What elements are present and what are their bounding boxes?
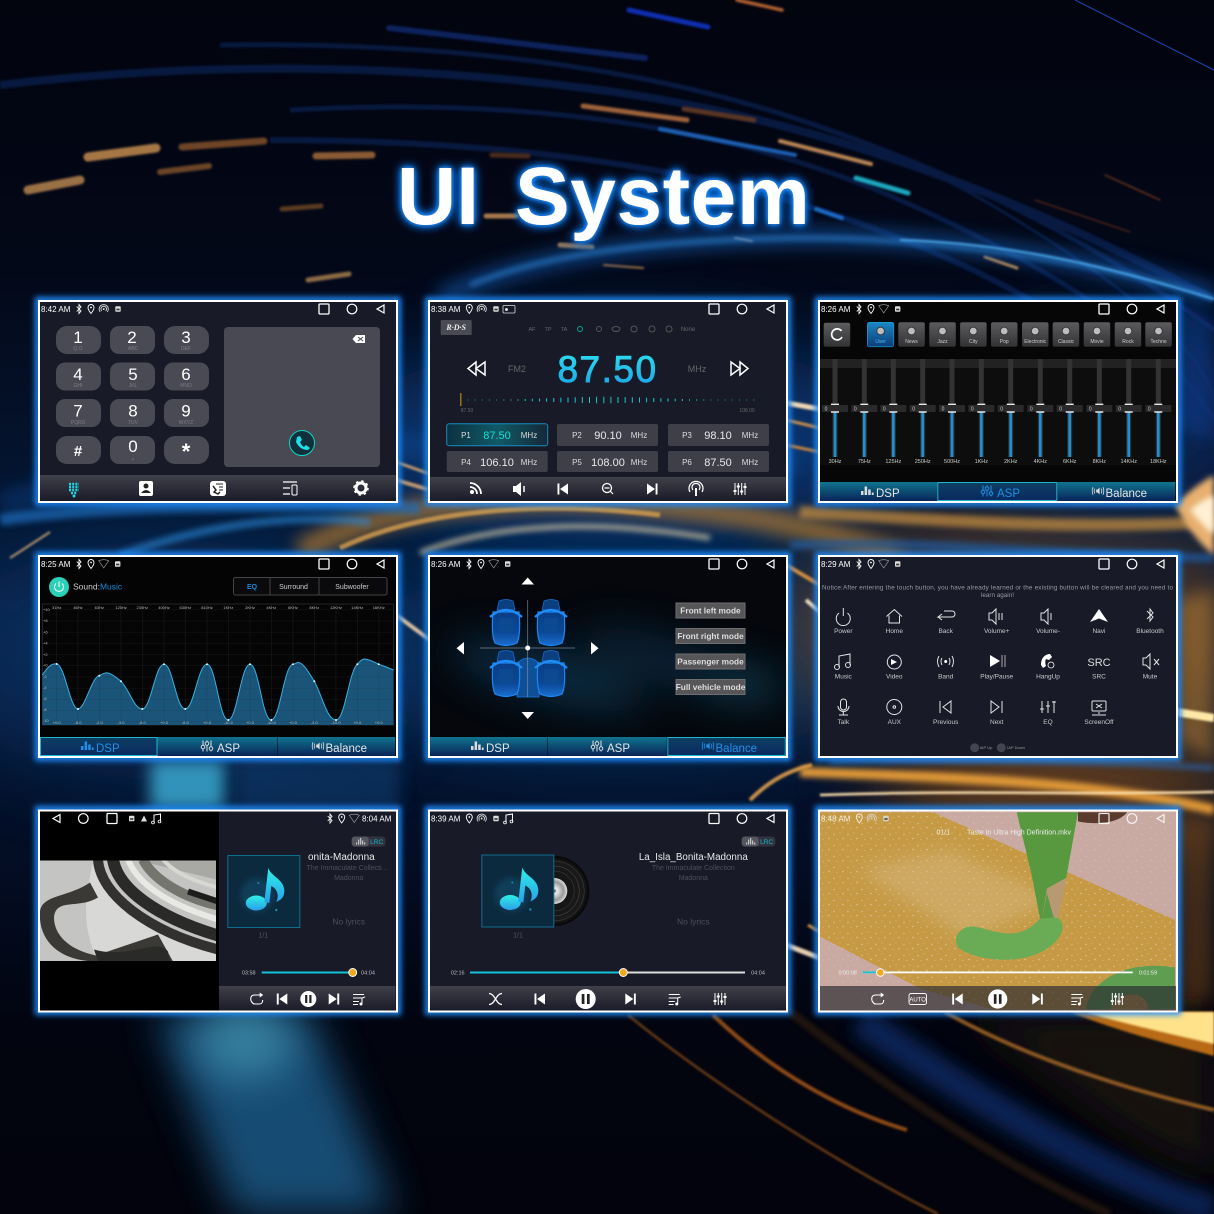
function buttons: Talk xyxy=(838,719,850,726)
dial keypad: 9 xyxy=(181,402,191,420)
mode buttons: Front left mode xyxy=(680,606,741,616)
balance crosshair xyxy=(480,600,575,697)
bottom bar xyxy=(40,475,396,501)
EQ chart: -8.0 xyxy=(182,720,190,725)
playback bar xyxy=(430,986,786,1010)
status bar xyxy=(821,304,1164,314)
mid swirl xyxy=(300,499,900,560)
mode tabs: Subwoofer xyxy=(335,584,369,591)
album art xyxy=(482,855,554,927)
sound presets: Techno xyxy=(1150,339,1167,345)
presets: P3 xyxy=(682,431,692,440)
EQ chart: -10 xyxy=(43,718,50,723)
slider bank: 500Hz xyxy=(944,459,960,465)
margin streaks beside panels xyxy=(396,403,1214,958)
EQ chart: 12KHz xyxy=(330,605,342,610)
presets: 106.10 xyxy=(480,457,514,469)
direction arrows xyxy=(456,578,598,719)
EQ chart: +0.0 xyxy=(353,720,362,725)
function buttons: ScreenOff xyxy=(1084,719,1114,726)
video frame xyxy=(820,812,1176,1010)
panel: music player with vinyl xyxy=(429,810,787,1012)
dim concentric arcs xyxy=(0,45,1214,420)
mode buttons: Front right mode xyxy=(677,631,744,641)
RDS flags: TA xyxy=(561,327,568,333)
slider bank: 0 xyxy=(912,406,915,412)
EQ chart: +2 xyxy=(43,652,48,657)
mode buttons: Passenger mode xyxy=(677,656,744,666)
presets: MHz xyxy=(521,431,537,440)
EQ chart: -8.0 xyxy=(139,720,147,725)
slider bank: 4KHz xyxy=(1034,459,1047,465)
presets: P1 xyxy=(461,431,471,440)
slider bank: 8KHz xyxy=(1093,459,1106,465)
tab bar xyxy=(40,737,395,756)
EQ chart: 2KHz xyxy=(245,605,255,610)
dial keypad xyxy=(56,326,209,464)
tab bar xyxy=(430,737,785,756)
function buttons xyxy=(834,608,1164,726)
presets: 90.10 xyxy=(594,430,622,442)
tab bar xyxy=(820,482,1175,501)
vinyl record xyxy=(519,856,589,926)
playback bar xyxy=(820,986,1176,1010)
slider bank: 0 xyxy=(854,406,857,412)
status bar: 8:25 AM xyxy=(41,560,71,569)
EQ chart: 8KHz xyxy=(309,605,319,610)
RDS button: R·D·S xyxy=(445,323,467,332)
track info: The Immaculate Collection xyxy=(652,865,735,872)
slider bank: 250Hz xyxy=(915,459,931,465)
EQ chart: 630Hz xyxy=(180,605,191,610)
slider bank: 18KHz xyxy=(1150,459,1167,465)
EQ chart: -3.0 xyxy=(118,720,125,725)
unit: MHz xyxy=(688,364,707,374)
bottom right swirl xyxy=(860,1020,1214,1210)
track info: La_Isla_Bonita-Madonna xyxy=(639,852,748,863)
progress bar: 03:58 xyxy=(242,970,256,976)
slider bank: 125Hz xyxy=(885,459,901,465)
power toggle xyxy=(49,577,69,597)
status bar xyxy=(431,814,774,824)
track info: 1/1 xyxy=(513,932,523,940)
status bar: 8:48 AM xyxy=(821,814,851,824)
status bar: 8:26 AM xyxy=(431,560,461,569)
EQ chart: -2.0 xyxy=(96,720,104,725)
function buttons: Band xyxy=(938,674,954,680)
track info xyxy=(513,852,748,940)
presets: P2 xyxy=(572,431,582,440)
dial keypad: 2 xyxy=(127,328,137,347)
function buttons: SRC xyxy=(1087,657,1111,669)
sound presets xyxy=(867,322,1172,347)
RDS flags: TP xyxy=(544,327,552,333)
status bar xyxy=(821,814,1164,824)
function buttons: Power xyxy=(834,628,853,635)
tab bar: Balance xyxy=(1106,488,1147,500)
tab bar: DSP xyxy=(96,743,120,755)
RDS button xyxy=(441,320,472,335)
dial keypad: JKL xyxy=(129,383,138,389)
EQ chart: 63Hz xyxy=(95,605,104,610)
lower swirl xyxy=(150,760,225,810)
EQ chart: 230Hz xyxy=(137,605,148,610)
presets: 87.50 xyxy=(704,457,732,469)
slider bank: 0 xyxy=(1000,406,1003,412)
EQ chart: +0 xyxy=(43,662,48,668)
status bar: 8:26 AM xyxy=(821,305,851,314)
slider bank: 0 xyxy=(971,406,974,412)
EQ chart: +0.0 xyxy=(160,720,169,725)
IAP controls: IAP Up xyxy=(980,745,993,750)
EQ chart: +0.0 xyxy=(375,720,383,725)
sound presets: News xyxy=(905,339,918,345)
EQ chart: -10.0 xyxy=(331,720,341,725)
fast forward xyxy=(731,362,748,375)
dial keypad: ABC xyxy=(128,346,139,352)
dial keypad: 1 xyxy=(73,328,83,347)
dial keypad: 5 xyxy=(128,365,138,384)
function buttons: Next xyxy=(990,719,1004,726)
EQ chart: 31Hz xyxy=(52,605,61,610)
track info: No lyrics xyxy=(332,916,365,926)
status bar: 8:29 AM xyxy=(821,560,851,569)
sound presets: User xyxy=(875,339,886,345)
notice: Notice:After entering the touch button, you have already learned or the existing button will be cleared and you need to xyxy=(822,584,1173,592)
function buttons: Music xyxy=(835,674,853,680)
panel: FM radio xyxy=(429,301,787,502)
progress bar: 0:00:08 xyxy=(839,970,857,976)
notice xyxy=(822,584,1173,599)
function buttons: EQ xyxy=(1043,719,1053,726)
EQ chart: -6 xyxy=(43,696,47,701)
track info: Madonna xyxy=(334,875,363,882)
presets: MHz xyxy=(742,431,758,440)
tab bar: ASP xyxy=(607,743,630,755)
tab bar: Balance xyxy=(716,743,757,755)
sound presets: Rock xyxy=(1122,339,1134,345)
mode tabs xyxy=(234,578,387,595)
album art xyxy=(228,856,300,928)
dial keypad: * xyxy=(182,439,191,464)
file title: Taste in Ultra High Definition.mkv xyxy=(967,830,1072,836)
presets: 87.50 xyxy=(483,430,511,442)
EQ chart: 400Hz xyxy=(158,605,170,610)
dial keypad: DEF xyxy=(181,346,191,352)
progress bar: 0:01:59 xyxy=(1139,970,1157,976)
EQ chart: 46Hz xyxy=(73,605,83,610)
dial keypad: 8 xyxy=(128,402,138,420)
LRC toggle xyxy=(742,836,775,846)
refresh button xyxy=(824,323,850,347)
EQ chart: 810Hz xyxy=(201,605,213,610)
function buttons: Play/Pause xyxy=(980,674,1014,680)
dial keypad: 7 xyxy=(73,402,83,420)
progress bar: 04:04 xyxy=(361,970,375,976)
function buttons: Back xyxy=(938,628,954,635)
dial keypad: TUV xyxy=(128,420,139,426)
bottom light column xyxy=(155,1012,395,1214)
sound presets: City xyxy=(969,339,978,345)
bottom bar xyxy=(430,477,786,501)
title: UI System: System xyxy=(515,151,810,242)
EQ chart: 4KHz xyxy=(266,605,276,610)
presets: P6 xyxy=(682,458,692,467)
dial keypad: 4 xyxy=(73,365,83,384)
status bar xyxy=(431,304,774,314)
streak dashes xyxy=(28,0,1160,280)
status bar: 8:38 AM xyxy=(431,305,461,314)
function buttons: Mute xyxy=(1143,674,1158,680)
playback bar: AUTO xyxy=(909,998,926,1004)
slider bank: 0 xyxy=(942,406,945,412)
function buttons: Navi xyxy=(1092,628,1106,635)
EQ chart: +4 xyxy=(43,640,48,646)
cookware photo xyxy=(40,860,218,962)
sound presets: Pop xyxy=(1000,339,1009,345)
sound presets: Movie xyxy=(1090,339,1104,345)
dial keypad: # xyxy=(74,443,83,460)
black video pane xyxy=(40,812,219,1010)
progress bar: 02:16 xyxy=(451,970,465,976)
EQ chart: +0.0 xyxy=(289,720,298,725)
function buttons: Volume+ xyxy=(984,628,1010,635)
RDS flags: AF xyxy=(528,327,536,333)
EQ chart: -10.0 xyxy=(224,720,234,725)
status bar: 8:39 AM xyxy=(431,814,461,824)
track info: No lyrics xyxy=(677,916,710,926)
sound presets: Jazz xyxy=(937,339,948,345)
slider bank: 75Hz xyxy=(858,459,871,465)
function buttons: Bluetooth xyxy=(1136,628,1164,635)
progress bar xyxy=(451,968,765,976)
playback bar xyxy=(219,986,396,1010)
EQ chart: +0.0 xyxy=(53,720,61,725)
dial keypad: + xyxy=(132,457,135,463)
EQ chart: +0.0 xyxy=(246,720,255,725)
dial keypad: 0 xyxy=(128,437,138,456)
slider bank: 6KHz xyxy=(1063,459,1077,465)
slider bank: 0 xyxy=(883,406,886,412)
dial keypad: Q.O xyxy=(73,346,83,352)
presets: MHz xyxy=(631,431,647,440)
glowing blue arc xyxy=(440,237,1214,298)
RDS flags: None xyxy=(681,327,696,333)
slider bank: 0 xyxy=(825,406,828,412)
RDS flags xyxy=(528,326,696,333)
EQ chart: 6KHz xyxy=(288,605,298,610)
tab bar: DSP xyxy=(486,743,510,755)
tuning scale xyxy=(460,393,755,414)
function buttons: HangUp xyxy=(1036,674,1060,680)
status bar xyxy=(821,559,1164,569)
EQ chart: 16KHz xyxy=(373,605,385,610)
EQ chart: 1KHz xyxy=(223,605,233,610)
presets: MHz xyxy=(521,458,537,467)
progress bar xyxy=(242,968,375,976)
status bar xyxy=(41,304,384,314)
track info xyxy=(258,852,388,940)
EQ chart: -2 xyxy=(43,674,47,679)
slider bank: 1KHz xyxy=(975,459,988,465)
slider bank: 0 xyxy=(1059,406,1062,412)
band label: FM2 xyxy=(508,364,526,374)
dial keypad: GHI xyxy=(74,383,82,389)
panel: phone dialer xyxy=(39,301,397,502)
track info: 1/1 xyxy=(258,932,268,940)
slider bank: 30Hz xyxy=(829,459,842,465)
slider bank: 0 xyxy=(1089,406,1092,412)
slider bank: 0 xyxy=(1148,406,1151,412)
EQ chart: -4 xyxy=(43,685,47,690)
slider bank xyxy=(820,359,1176,465)
status bar xyxy=(53,814,392,824)
panel: music player with cover xyxy=(39,810,397,1012)
file title: 01/1 xyxy=(936,830,950,836)
function buttons: Video xyxy=(886,674,903,680)
EQ chart: -10.0 xyxy=(267,720,277,725)
tab bar: DSP xyxy=(876,488,900,500)
tab bar: Balance xyxy=(326,743,367,755)
function buttons: Volume- xyxy=(1036,628,1060,635)
track info: The Immaculate Collecti... xyxy=(307,865,388,872)
rewind xyxy=(468,362,485,375)
tab bar: ASP xyxy=(997,488,1020,500)
EQ chart: +0.0 xyxy=(203,720,212,725)
panel: video player xyxy=(819,810,1177,1012)
frequency: 87.50 xyxy=(557,349,658,390)
EQ chart xyxy=(42,604,394,725)
LRC toggle xyxy=(352,836,385,846)
panel: DSP curve xyxy=(39,556,397,757)
panel: steering wheel learning xyxy=(819,556,1177,757)
function buttons: SRC xyxy=(1092,674,1106,680)
title: UI System: UI xyxy=(397,151,479,242)
sound presets: Electronic xyxy=(1024,339,1047,345)
mode buttons xyxy=(676,603,746,694)
IAP controls: IAP Down xyxy=(1007,745,1025,750)
sound label: Sound:Music xyxy=(73,582,123,592)
presets: 98.10 xyxy=(704,430,732,442)
tab bar: ASP xyxy=(217,743,240,755)
dial keypad: PQRS xyxy=(71,420,86,426)
panel glows xyxy=(38,300,1178,1012)
mode buttons: Full vehicle mode xyxy=(676,682,746,692)
slider bank: 0 xyxy=(1030,406,1033,412)
progress bar: 04:04 xyxy=(751,970,765,976)
function buttons: Previous xyxy=(933,719,959,726)
dial keypad: 6 xyxy=(181,365,191,384)
slider bank: 0 xyxy=(1118,406,1121,412)
presets: MHz xyxy=(631,458,647,467)
presets: P5 xyxy=(572,458,582,467)
mode tabs: Surround xyxy=(279,584,308,591)
panel: ASP equalizer xyxy=(819,301,1177,502)
number display xyxy=(224,327,380,467)
status bar xyxy=(41,559,384,569)
EQ chart: -8.0 xyxy=(75,720,82,725)
status bar: 8:42 AM xyxy=(41,305,71,314)
EQ chart: 14KHz xyxy=(351,605,363,610)
dial keypad: 3 xyxy=(181,328,191,347)
EQ chart: +8 xyxy=(43,618,48,623)
presets: P4 xyxy=(461,458,471,467)
EQ chart: 125Hz xyxy=(115,605,127,610)
track info: onita-Madonna xyxy=(308,852,375,863)
blue haze xyxy=(445,613,784,726)
IAP controls xyxy=(970,743,1025,752)
notice: learn again! xyxy=(981,592,1014,599)
EQ chart: -8 xyxy=(43,707,47,712)
track info: Madonna xyxy=(679,875,708,882)
dial keypad: MNO xyxy=(180,383,192,389)
dial keypad: WXYZ xyxy=(179,420,193,426)
panel: balance xyxy=(429,556,787,757)
slider bank: 14KHz xyxy=(1120,459,1137,465)
tuning scale: 108.00 xyxy=(739,408,755,414)
presets: 108.00 xyxy=(591,457,625,469)
EQ chart: -3.0 xyxy=(311,720,319,725)
function buttons: Home xyxy=(886,628,903,635)
status bar xyxy=(431,559,774,569)
EQ chart: +10 xyxy=(43,607,51,612)
mode tabs: EQ xyxy=(247,584,258,591)
progress bar xyxy=(839,969,1157,976)
slider bank: 2KHz xyxy=(1004,459,1018,465)
car seats xyxy=(490,600,567,697)
status bar: 8:04 AM xyxy=(362,814,392,824)
function buttons: AUX xyxy=(888,719,902,726)
presets xyxy=(447,424,769,472)
presets: MHz xyxy=(742,458,758,467)
tuning scale: 87.50 xyxy=(461,408,473,414)
EQ chart: +6 xyxy=(43,630,48,634)
sound presets: Classic xyxy=(1058,339,1075,345)
